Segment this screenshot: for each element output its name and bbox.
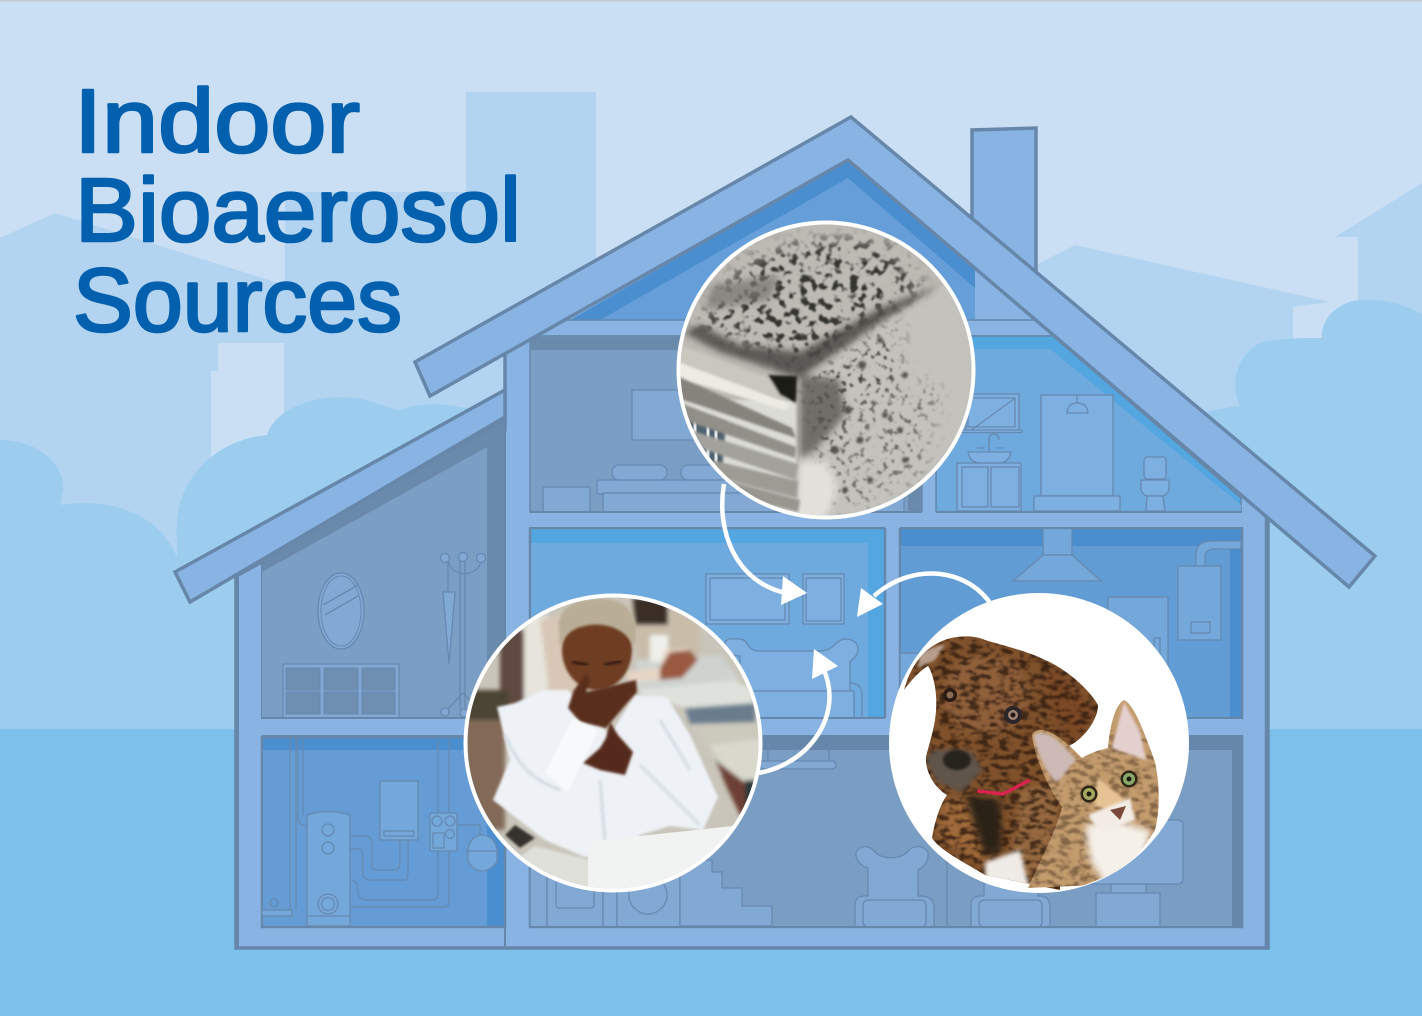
icon: control panel <box>430 813 457 851</box>
icon: coat rack and umbrella <box>440 552 486 717</box>
icon: window <box>632 390 712 440</box>
laptop <box>521 846 588 886</box>
photo: person coughing at laptop <box>460 590 770 900</box>
title: Bioaerosol <box>75 161 521 261</box>
room: bathroom <box>936 336 1241 512</box>
room: kitchen <box>900 528 1242 718</box>
icon: picture frames <box>706 574 844 624</box>
room: ground floor living area <box>530 736 1242 927</box>
icon: toilet <box>1141 457 1169 511</box>
icon: sideboard <box>283 664 399 718</box>
icon: bed <box>597 465 857 512</box>
room: left annex lower utility <box>262 737 505 927</box>
title: Indoor <box>74 72 360 172</box>
side roof <box>175 390 505 602</box>
floor slabs <box>262 512 1242 736</box>
arrow: pets to room <box>857 573 992 617</box>
icon: kitchen unit <box>1108 597 1168 718</box>
title <box>73 72 521 351</box>
icon: appliances <box>530 860 680 927</box>
icon: pressure gauge <box>262 899 292 916</box>
title: Sources <box>73 251 402 351</box>
icon: sofa <box>725 639 862 718</box>
icon: staircase <box>680 860 772 926</box>
main roof <box>415 117 1375 587</box>
icon: boiler <box>380 781 418 840</box>
icon: bathroom mirror <box>960 394 1022 432</box>
chimney <box>972 128 1036 320</box>
mouth hand <box>568 674 637 728</box>
chest hand <box>583 722 633 775</box>
photo: dog and cat <box>889 593 1189 900</box>
ground <box>0 729 1422 1016</box>
icon: water heater <box>1178 541 1241 640</box>
icon: expansion vessel <box>466 835 499 871</box>
arrow: person to room <box>758 649 838 773</box>
icon: cooker hood <box>1013 528 1101 581</box>
shirt <box>493 690 718 860</box>
raised cuff <box>548 718 595 788</box>
blind slats <box>678 345 800 525</box>
icon: armchair <box>855 847 934 927</box>
room: left annex upper hallway <box>262 420 505 718</box>
attic <box>532 160 1054 336</box>
house walls <box>236 140 1268 948</box>
background trees and clouds <box>0 300 1422 740</box>
arrow: mold to room <box>722 484 807 605</box>
room: bedroom <box>530 336 922 512</box>
dog <box>900 630 1100 900</box>
icon: second armchair <box>947 860 1050 927</box>
house cross-section <box>175 117 1375 948</box>
icon: sink cabinet <box>957 434 1021 511</box>
photo: mold on ceiling corner <box>670 215 980 525</box>
head <box>562 610 632 690</box>
icon: television on stand <box>1040 820 1183 927</box>
cat <box>1028 700 1160 890</box>
background skyline: distant buildings <box>0 92 1422 560</box>
icon: nightstand <box>543 487 590 512</box>
icon: pipes <box>290 738 480 910</box>
icon: shower <box>1034 395 1120 511</box>
icon: low table <box>760 737 836 769</box>
icon: oval mirror <box>318 573 364 649</box>
window behind blinds <box>684 399 798 512</box>
room: living room <box>530 528 885 718</box>
icon: water tank <box>307 812 350 926</box>
